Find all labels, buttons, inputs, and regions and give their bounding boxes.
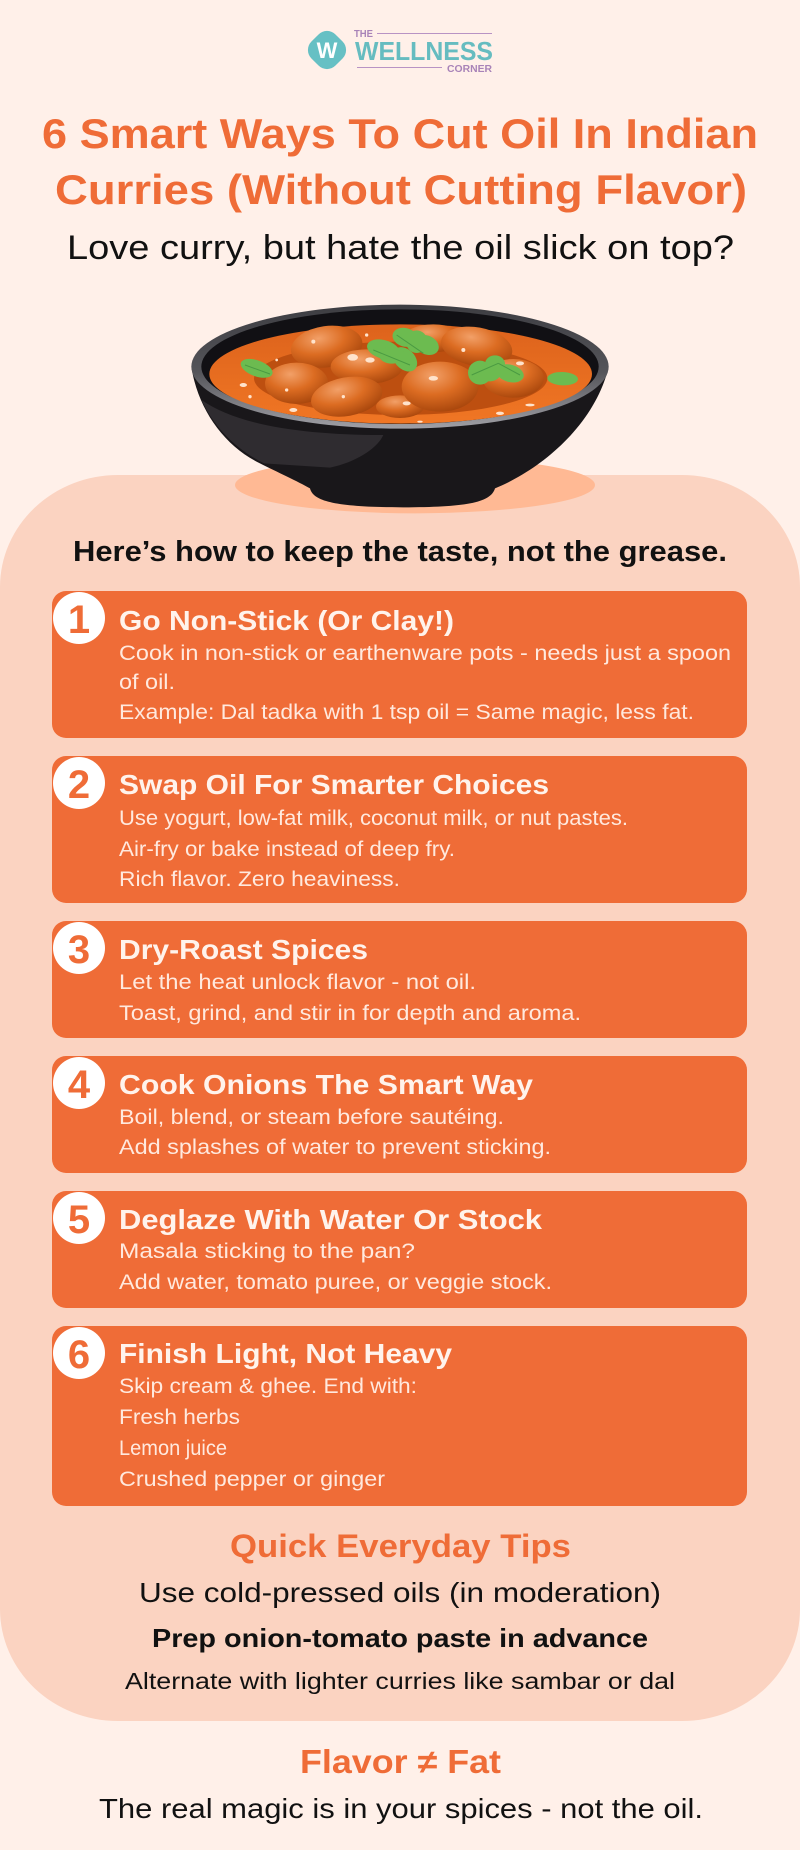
card 2 text: Use yogurt, low-fat milk, coconut milk, or nut pastes. — [119, 806, 628, 830]
card 5 text — [119, 1239, 552, 1294]
tip: cold-pressed oils: Use cold-pressed oils (in moderation) — [139, 1577, 661, 1608]
card 6 text: Fresh herbs — [119, 1405, 240, 1429]
title — [42, 110, 758, 213]
illustration: curry bowl — [191, 305, 609, 513]
card 6 text — [119, 1374, 417, 1491]
tip: onion-tomato paste: Prep onion-tomato paste in advance — [152, 1623, 648, 1653]
card 1 text: of oil. — [119, 670, 175, 694]
card 2 text: Rich flavor. Zero heaviness. — [119, 867, 400, 891]
card 1 text: Example: Dal tadka with 1 tsp oil = Same magic, less fat. — [119, 700, 694, 724]
icon: logo badge — [303, 26, 351, 74]
card 3 text: Toast, grind, and stir in for depth and aroma. — [119, 1001, 581, 1025]
card 5 text: Masala sticking to the pan? — [119, 1239, 415, 1263]
number badge 1: 1 — [68, 598, 90, 642]
number badge 2 — [53, 757, 105, 809]
number badge 3 — [53, 922, 105, 974]
number badge 5: 5 — [68, 1198, 90, 1242]
tip: lighter curries: Alternate with lighter curries like sambar or dal — [125, 1668, 675, 1694]
heading: quick everyday tips: Quick Everyday Tips — [230, 1528, 571, 1564]
card 6 text: Skip cream & ghee. End with: — [119, 1374, 417, 1398]
card 4 text: Boil, blend, or steam before sautéing. — [119, 1105, 504, 1129]
logo: The Wellness Corner: CORNER — [447, 64, 493, 75]
title: 6 Smart Ways To Cut Oil In Indian — [42, 110, 758, 157]
title: Curries (Without Cutting Flavor) — [55, 166, 747, 213]
card 2 text: Air-fry or bake instead of deep fry. — [119, 837, 455, 861]
logo: The Wellness Corner: WELLNESS — [355, 36, 493, 66]
card 4 text: Add splashes of water to prevent sticking. — [119, 1135, 551, 1159]
card 2 text — [119, 806, 628, 891]
number badge 1 — [53, 592, 105, 644]
card 5 text: Add water, tomato puree, or veggie stock. — [119, 1270, 552, 1294]
card 6 text: Lemon juice — [119, 1437, 227, 1460]
card 4 — [52, 1056, 747, 1173]
heading: flavor not equal fat: Flavor ≠ Fat — [300, 1743, 501, 1780]
card 2 heading: Swap Oil For Smarter Choices — [119, 769, 549, 800]
subtitle: Love curry, but hate the oil slick on top? — [67, 229, 734, 267]
closing line: The real magic is in your spices - not the oil. — [99, 1793, 703, 1824]
card 1 text — [119, 641, 731, 724]
card 6 heading: Finish Light, Not Heavy — [119, 1338, 452, 1369]
logo: The Wellness Corner — [303, 26, 493, 75]
card 3 — [52, 921, 747, 1038]
card 2 — [52, 756, 747, 903]
number badge 6 — [53, 1327, 105, 1379]
card 4 text — [119, 1105, 551, 1159]
number badge 2: 2 — [68, 763, 90, 807]
icon: logo badge: W — [317, 38, 338, 63]
card 3 text: Let the heat unlock flavor - not oil. — [119, 970, 476, 994]
card 5 heading: Deglaze With Water Or Stock — [119, 1204, 542, 1235]
card 1 heading: Go Non-Stick (Or Clay!) — [119, 605, 454, 636]
card 6 — [52, 1326, 747, 1506]
panel: tips background — [0, 475, 800, 1721]
card 6 text: Crushed pepper or ginger — [119, 1467, 385, 1491]
number badge 5 — [53, 1192, 105, 1244]
number badge 6: 6 — [68, 1333, 90, 1377]
card 1 text: Cook in non-stick or earthenware pots - needs just a spoon — [119, 641, 731, 665]
card 5 — [52, 1191, 747, 1308]
number badge 4: 4 — [68, 1063, 91, 1107]
heading: keep the taste: Here’s how to keep the taste, not the grease. — [73, 536, 727, 568]
card 3 text — [119, 970, 581, 1025]
logo: The Wellness Corner: THE — [354, 29, 373, 40]
card 1 — [52, 591, 747, 738]
number badge 3: 3 — [68, 928, 90, 972]
card 3 heading: Dry-Roast Spices — [119, 934, 368, 965]
card 4 heading: Cook Onions The Smart Way — [119, 1069, 533, 1100]
number badge 4 — [53, 1057, 105, 1109]
